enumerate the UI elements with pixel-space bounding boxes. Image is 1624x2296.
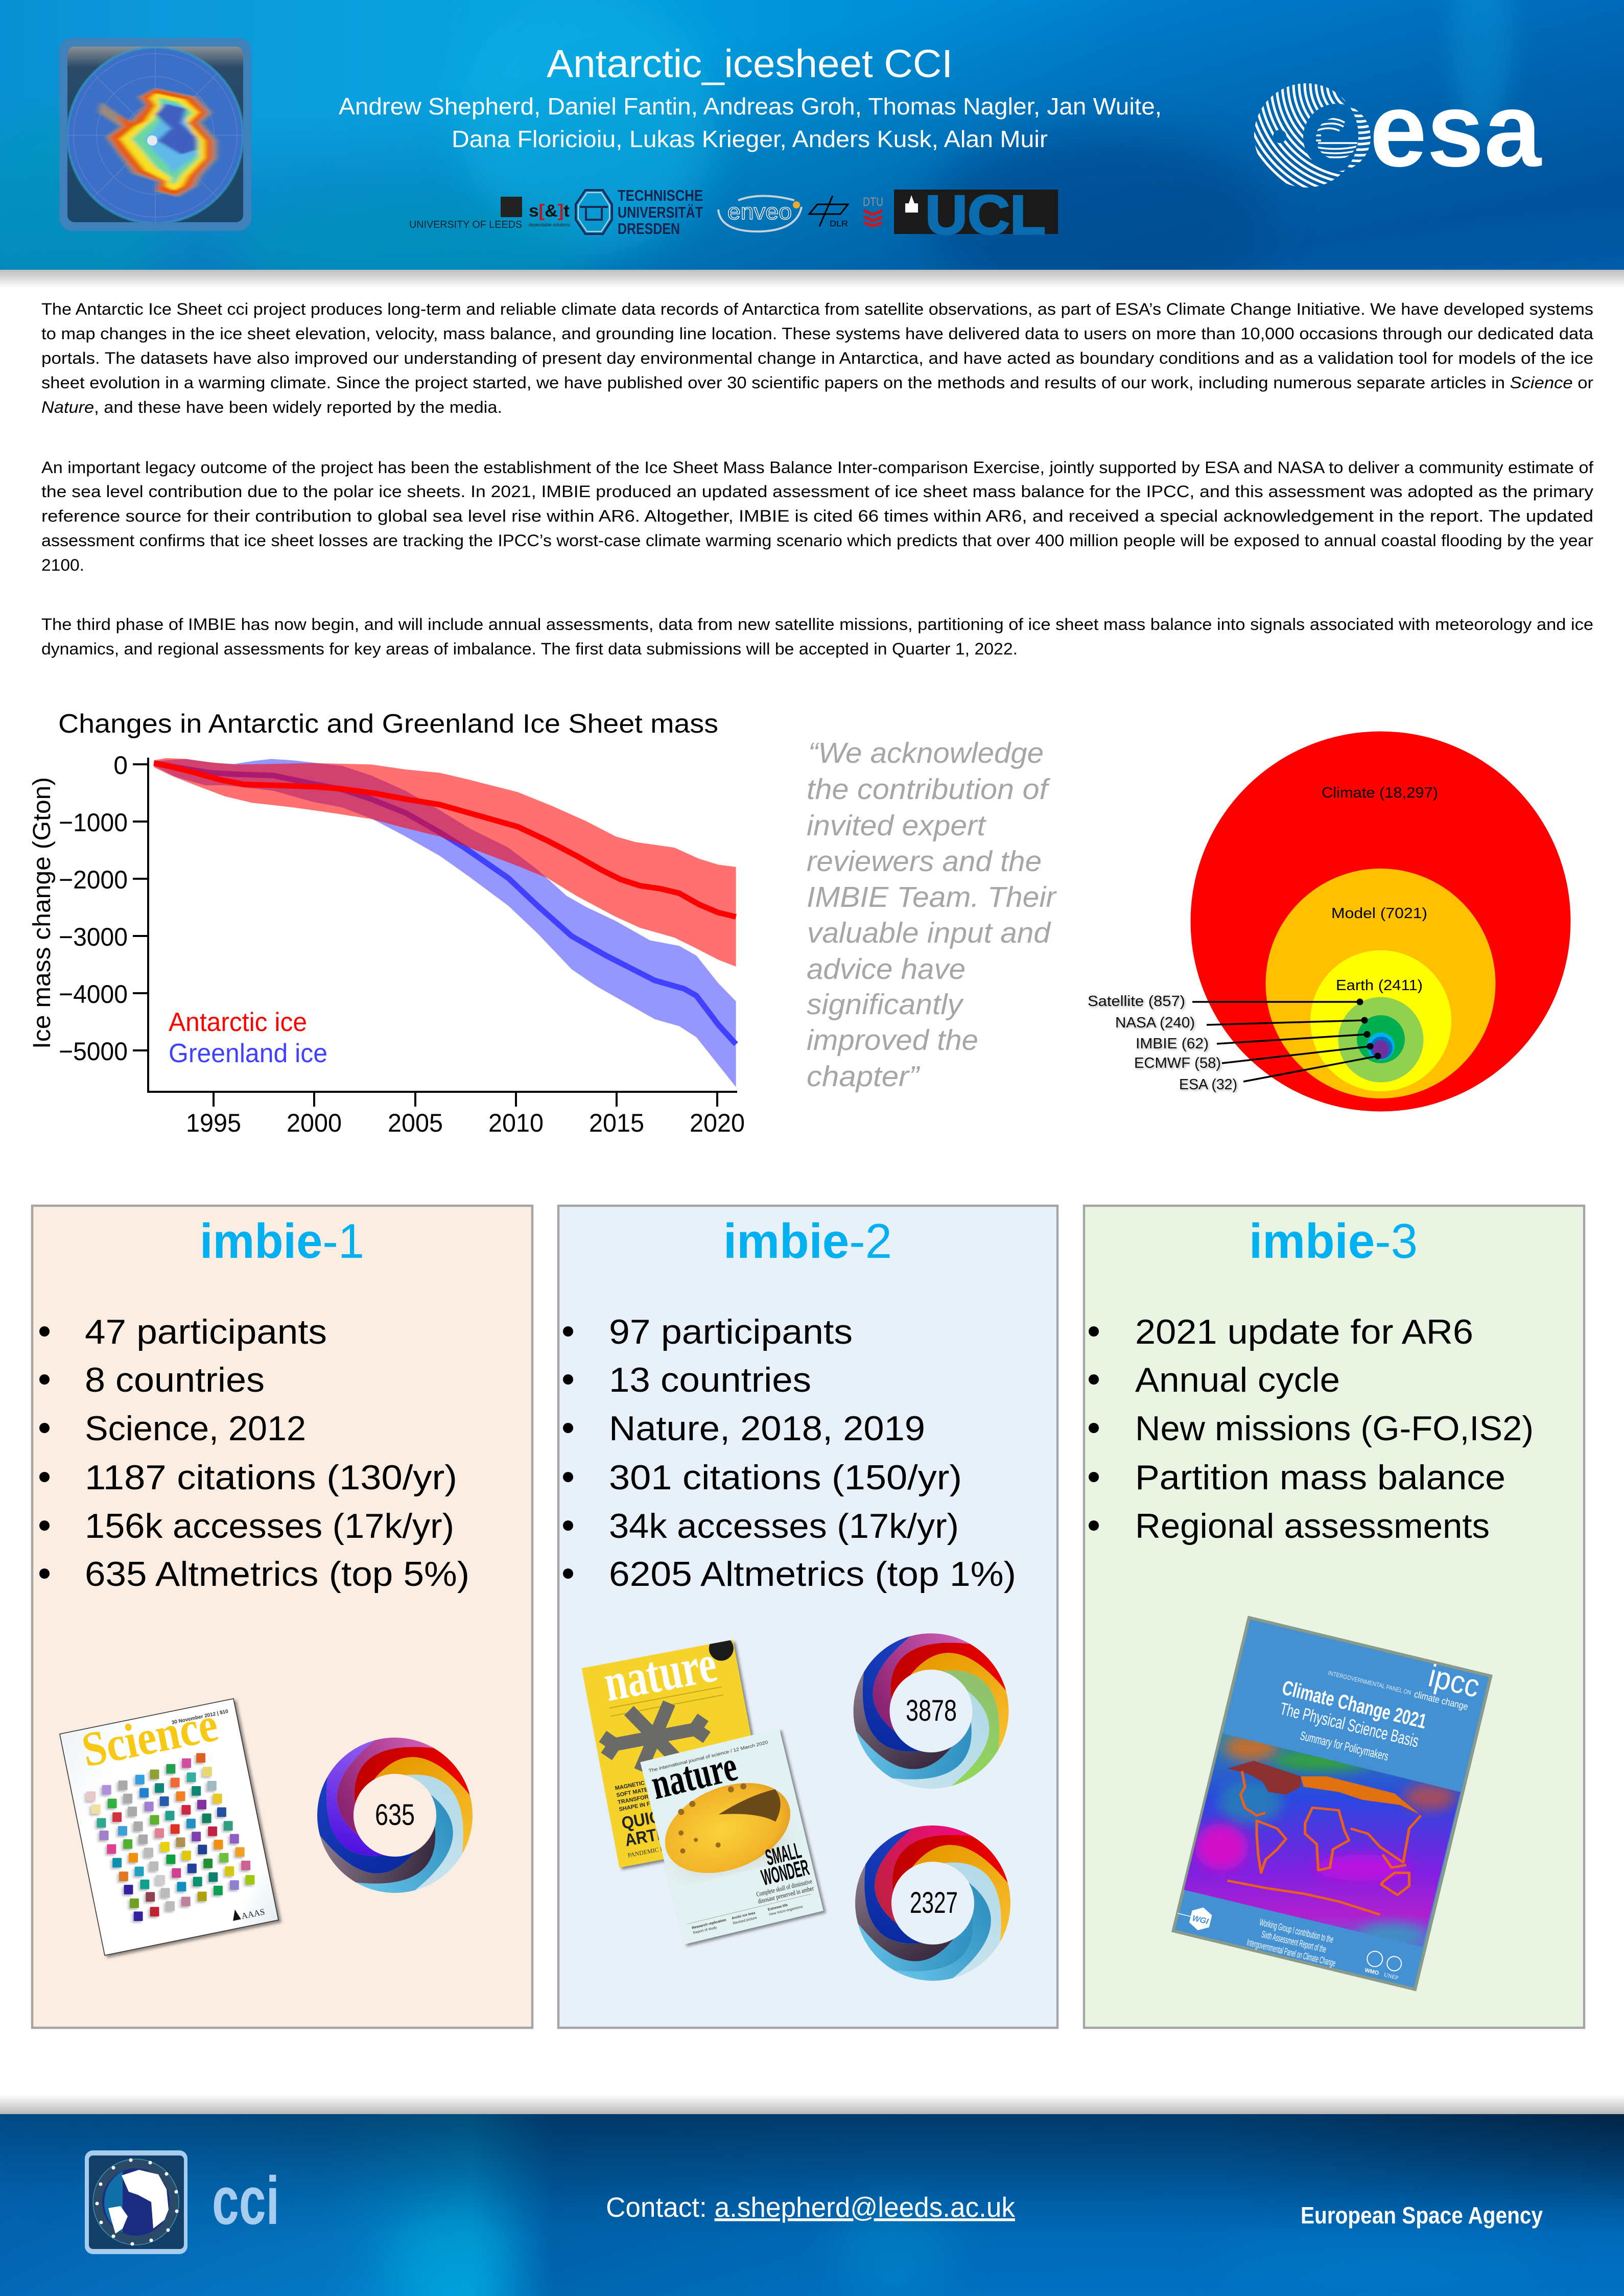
x axis labels	[186, 1109, 745, 1137]
journal cover: Nature amber: Report of study	[693, 1926, 717, 1935]
bullet list: 1187 citations (130/yr)	[85, 1458, 457, 1497]
journal cover: Nature amber: SMALL	[763, 1838, 804, 1870]
journal cover: Nature yellow: MAGNETIC	[615, 1780, 645, 1792]
report cover: IPCC Climate Change 2021: Intergovernmental Panel on Climate Change	[1245, 1937, 1336, 1969]
footer banner	[0, 2114, 1624, 2296]
x axis labels: 2010	[488, 1109, 544, 1137]
footer shadow	[0, 2095, 1624, 2114]
journal cover: Nature amber: Revised picture	[733, 1916, 758, 1926]
journal cover: Science	[58, 1692, 278, 1955]
x axis labels: 2020	[690, 1109, 745, 1137]
y axis labels: −1000	[59, 808, 128, 837]
text block: paragraph 1: Nature, and these have been widely reported by the media.	[41, 398, 502, 416]
report cover: IPCC Climate Change 2021	[1173, 1614, 1492, 1989]
quote: improved the	[807, 1024, 978, 1057]
authors: Andrew Shepherd, Daniel Fantin, Andreas Groh, Thomas Nagler, Jan Wuite,	[339, 93, 1162, 120]
quote: valuable input and	[807, 917, 1051, 949]
icon: Antarctic ice sheet logo	[59, 38, 251, 231]
x axis labels: 2015	[589, 1109, 644, 1137]
partner logos	[409, 184, 1058, 246]
x axis labels: 2000	[287, 1109, 342, 1137]
partner logos: DRESDEN	[618, 220, 680, 238]
bullet list: 13 countries	[609, 1361, 811, 1399]
y axis labels: −3000	[59, 923, 128, 951]
bullet list: 2021 update for AR6	[1135, 1313, 1473, 1351]
journal cover: Nature amber: The international journal of science / 12 March 2020	[648, 1740, 768, 1773]
bullet list: 301 citations (150/yr)	[609, 1458, 962, 1497]
header shadow	[0, 270, 1624, 288]
quote: invited expert	[807, 809, 986, 842]
bullet list: 34k accesses (17k/yr)	[609, 1507, 959, 1545]
panel heading: imbie-2	[723, 1214, 892, 1269]
journal cover: Nature amber: How micro-organisms	[769, 1905, 804, 1917]
y axis labels: −5000	[59, 1037, 128, 1066]
altmetric donut: 3878: 3878	[906, 1694, 957, 1727]
journal cover: Nature amber: Extreme life	[767, 1904, 788, 1912]
x axis labels: 2005	[388, 1109, 443, 1137]
bullet list: Partition mass balance	[1135, 1458, 1505, 1497]
report cover: IPCC Climate Change 2021: Climate Change 2021	[1280, 1676, 1429, 1733]
y axis labels: −2000	[59, 865, 128, 894]
quote: the contribution of	[807, 773, 1050, 806]
altmetric donut: 635: 635	[375, 1798, 415, 1832]
cci wordmark: cci	[212, 2163, 279, 2239]
journal cover: Science: AAAS	[241, 1907, 266, 1921]
authors: Dana Floricioiu, Lukas Krieger, Anders Kusk, Alan Muir	[452, 126, 1048, 152]
journal cover: Nature amber: Research replication	[692, 1918, 726, 1930]
altmetric donut: 2327: 2327	[910, 1886, 958, 1919]
text block: paragraph 1: sheet evolution in a warming climate. Since the project started, we have published over 30 scientific papers on the methods and results of our work, including numerous separate articles in Science or	[41, 373, 1593, 392]
icon: ESA logo	[1254, 83, 1542, 188]
altmetric donut: 2327	[834, 1805, 1031, 2002]
report cover: IPCC Climate Change 2021: Working Group I contribution to the	[1258, 1917, 1334, 1946]
text block: paragraph 1	[41, 300, 1593, 416]
bullet list: 8 countries	[85, 1361, 265, 1399]
report cover: IPCC Climate Change 2021: climate change	[1413, 1689, 1469, 1713]
x axis labels: 1995	[186, 1109, 241, 1137]
partner logos: dependable solutions	[529, 222, 570, 227]
bullet list: 47 participants	[85, 1313, 327, 1351]
nested circles chart: citations: Model (7021)	[1331, 905, 1427, 922]
journal cover: Nature yellow: ARTIST	[623, 1821, 682, 1850]
text block: paragraph 2: reference source for their contribution to global sea level rise within AR6. Altogether, IMBIE is cited 66 times within AR6, and received a special acknowledgement in the report. The updated	[41, 507, 1593, 525]
panel heading: imbie-3	[1249, 1214, 1418, 1269]
header banner	[0, 0, 1624, 270]
bullet list	[563, 1313, 1016, 1594]
bullet list	[1089, 1313, 1534, 1545]
text block: paragraph 2	[41, 458, 1593, 574]
title: Antarctic_icesheet CCI	[547, 42, 953, 86]
nested circles chart: citations: Satellite (857)	[1088, 993, 1185, 1010]
panel heading: imbie-1	[200, 1214, 364, 1269]
quote: IMBIE Team. Their	[807, 881, 1057, 913]
report cover: IPCC Climate Change 2021: Sixth Assessment Report of the	[1260, 1929, 1327, 1955]
journal cover: Nature yellow: PANDEMIC PREVENTION	[627, 1839, 699, 1859]
journal cover: Science: 30 November 2012 | $10	[171, 1708, 229, 1726]
text block: paragraph 1: to map changes in the ice sheet elevation, velocity, mass balance, and grounding line location. These systems have delivered data to users on more than 10,000 occasions through our dedicated data	[41, 324, 1593, 343]
partner logos: UCL	[925, 184, 1046, 246]
altmetric donut: 3878	[833, 1612, 1029, 1810]
nested circles chart: citations: ESA (32)	[1179, 1076, 1237, 1093]
quote: advice have	[807, 953, 966, 986]
data series	[154, 758, 736, 1087]
text block: paragraph 2: 2100.	[41, 556, 84, 574]
report cover: IPCC Climate Change 2021: Summary for Policymakers	[1299, 1729, 1390, 1764]
text block: paragraph 1: The Antarctic Ice Sheet cci project produces long-term and reliable climate data records of Antarctica from satellite observations, as part of ESA’s Climate Change Initiative. We have developed systems	[41, 300, 1593, 318]
y axis labels: −4000	[59, 980, 128, 1009]
agency name: European Space Agency	[1301, 2202, 1543, 2229]
panel: imbie-1	[32, 1206, 532, 2028]
bullet list: New missions (G-FO,IS2)	[1135, 1409, 1534, 1448]
text block: paragraph 1: portals. The datasets have also improved our understanding of present day environmental change in Antarctica, and have acted as boundary conditions and as a validation tool for models of the ice	[41, 349, 1593, 367]
y axis title: Ice mass change (Gton)	[29, 777, 56, 1049]
bullet list: 6205 Altmetrics (top 1%)	[609, 1555, 1016, 1594]
report cover: IPCC Climate Change 2021: WMO	[1364, 1967, 1380, 1977]
journal cover: Nature amber: WONDER	[759, 1855, 812, 1890]
chart title: Changes in Antarctic and Greenland Ice Sheet mass	[58, 709, 718, 739]
contact: Contact: a.shepherd@leeds.ac.uk	[606, 2191, 1015, 2223]
nested circles chart: citations: Climate (18,297)	[1322, 785, 1438, 801]
partner logos: UNIVERSITY OF LEEDS	[409, 219, 522, 230]
bullet list: 156k accesses (17k/yr)	[85, 1507, 454, 1545]
bullet list: Regional assessments	[1135, 1507, 1490, 1545]
journal cover: Nature amber	[639, 1728, 823, 1944]
icon: ESA logo: esa	[1370, 71, 1542, 189]
altmetric donut: 635	[296, 1717, 493, 1914]
journal cover: Nature yellow	[581, 1640, 755, 1871]
journal cover: Nature amber: nature	[647, 1742, 742, 1809]
y axis labels	[59, 751, 128, 1066]
text block: paragraph 2: assessment confirms that ice sheet losses are tracking the IPCC’s worst-case climate warming scenario which predicts that over 400 million people will be exposed to annual coastal flooding by the year	[41, 531, 1593, 550]
journal cover: Nature amber: dinosaur preserved in amber	[757, 1884, 815, 1905]
nested circles chart: citations: NASA (240)	[1115, 1015, 1195, 1031]
quote	[807, 737, 1057, 1093]
journal cover: Nature yellow: SHAPE IN FRACTION	[619, 1796, 676, 1813]
bullet list: Science, 2012	[85, 1409, 306, 1448]
journal cover: Science: Science	[77, 1696, 222, 1777]
bullet list: 97 participants	[609, 1313, 853, 1351]
nested circles chart: citations: IMBIE (62)	[1136, 1036, 1209, 1052]
report cover: IPCC Climate Change 2021: UNEP	[1383, 1972, 1399, 1981]
report cover: IPCC Climate Change 2021: ipcc	[1425, 1658, 1483, 1704]
y axis labels: 0	[113, 751, 128, 780]
journal cover: Nature yellow: QUICK-	[620, 1804, 679, 1833]
nested circles chart: citations: Earth (2411)	[1336, 977, 1423, 994]
partner logos: s[&]t	[529, 201, 570, 221]
report cover: IPCC Climate Change 2021: WGI	[1191, 1914, 1210, 1926]
partner logos: UNIVERSITÄT	[618, 203, 703, 221]
partner logos: DLR	[830, 220, 848, 228]
quote: reviewers and the	[807, 845, 1042, 878]
journal cover: Nature amber: Arctic ice loss	[732, 1911, 756, 1920]
text block: paragraph 3: The third phase of IMBIE has now begin, and will include annual assessments, data from new satellite missions, partitioning of ice sheet mass balance into signals associated with meteorology and ice	[41, 615, 1593, 634]
text block: paragraph 2: An important legacy outcome of the project has been the establishment of the Ice Sheet Mass Balance Inter-comparison Exercise, jointly supported by ESA and NASA to deliver a community estimate of	[41, 458, 1593, 477]
report cover: IPCC Climate Change 2021: INTERGOVERNMENTAL PANEL ON	[1327, 1669, 1412, 1696]
legend	[169, 1008, 327, 1068]
text block: paragraph 2: the sea level contribution due to the polar ice sheets. In 2021, IMBIE produced an updated assessment of ice sheet mass balance for the IPCC, and this assessment was adopted as the primary	[41, 482, 1593, 501]
authors	[339, 93, 1162, 152]
text block: paragraph 3	[41, 615, 1593, 658]
legend: Antarctic ice	[169, 1008, 307, 1037]
journal cover: Nature amber: Complete skull of diminutive	[756, 1877, 813, 1898]
bullet list: 635 Altmetrics (top 5%)	[85, 1555, 469, 1594]
icon: CCI globe logo	[85, 2150, 187, 2254]
report cover: IPCC Climate Change 2021: The Physical Science Basis	[1278, 1699, 1421, 1751]
quote: significantly	[807, 988, 964, 1021]
line chart: ice sheet mass change	[29, 709, 745, 1137]
legend: Greenland ice	[169, 1039, 327, 1068]
nested circles chart: citations: ECMWF (58)	[1134, 1055, 1221, 1071]
bullet list	[39, 1313, 469, 1594]
partner logos: TECHNISCHE	[618, 186, 703, 204]
text block: paragraph 3: dynamics, and regional assessments for key areas of imbalance. The first data submissions will be accepted in Quarter 1, 2022.	[41, 640, 1018, 658]
chart axes	[133, 758, 737, 1107]
journal cover: Nature yellow: TRANSFORM THEIR	[617, 1790, 672, 1806]
bullet list: Nature, 2018, 2019	[609, 1409, 925, 1448]
nested circles chart: citations	[1088, 732, 1570, 1112]
journal cover: Nature yellow: SOFT MATERIALS	[616, 1784, 665, 1799]
partner logos: enveo	[727, 199, 792, 224]
panel: imbie-2	[558, 1206, 1057, 2028]
quote: “We acknowledge	[808, 737, 1044, 769]
panel: imbie-3	[1084, 1206, 1584, 2028]
bullet list: Annual cycle	[1135, 1361, 1340, 1399]
journal cover: Nature yellow: nature	[599, 1634, 721, 1713]
partner logos: DTU	[863, 195, 883, 209]
quote: chapter”	[807, 1060, 921, 1093]
